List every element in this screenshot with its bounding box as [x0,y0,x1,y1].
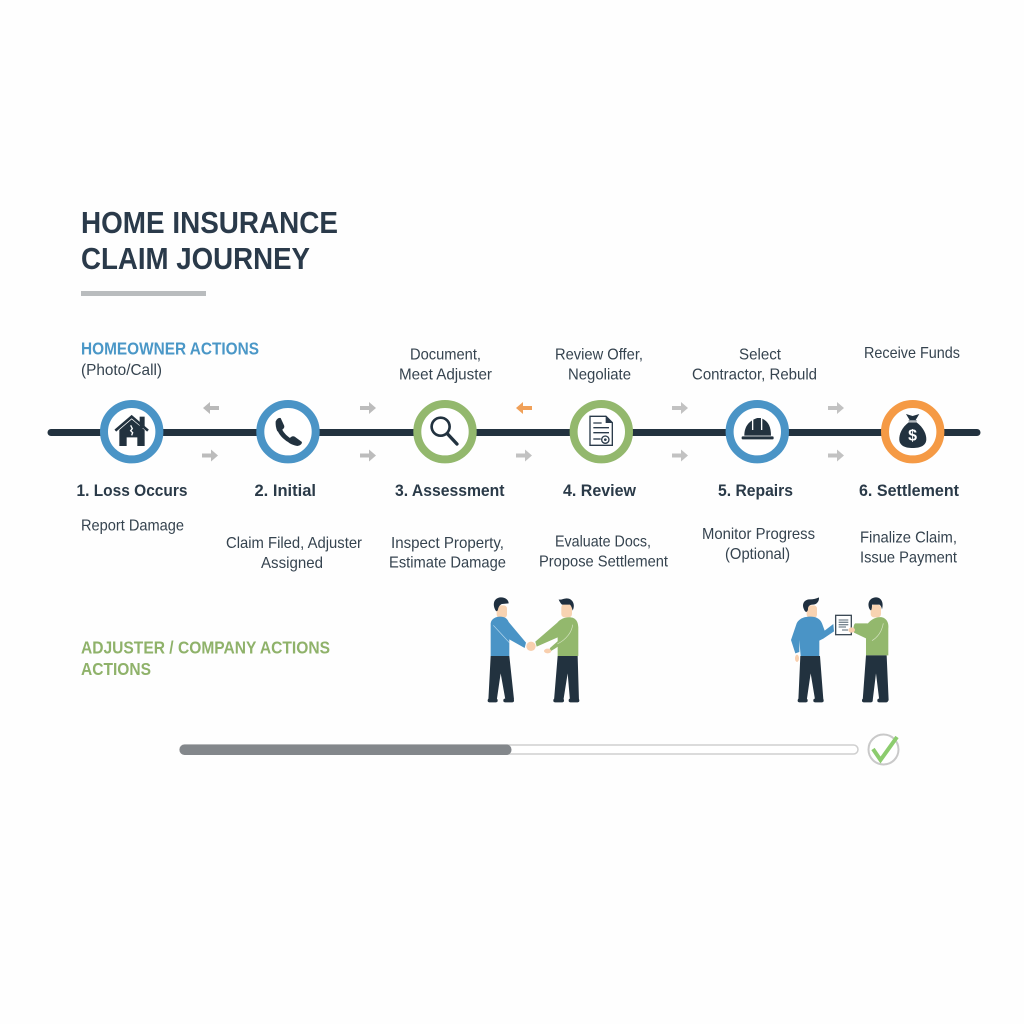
icon: magnifying glass [417,404,473,459]
title: HOME INSURANCE [81,205,338,240]
adjuster step actions: Evaluate Docs, [555,534,651,550]
step titles: 2. Initial [254,481,316,500]
homeowner actions label: HOMEOWNER ACTIONS [81,338,259,358]
homeowner step actions: Meet Adjuster [399,366,493,384]
step titles: 3. Assessment [395,481,505,500]
adjuster step actions: (Optional) [725,546,790,563]
homeowner step actions: Negoliate [568,366,631,384]
adjuster step actions: Finalize Claim, [860,530,957,546]
adjuster step actions: Inspect Property, [391,535,504,552]
step titles: 6. Settlement [859,481,959,500]
step arrows [202,402,844,462]
icon: completion check [868,734,898,764]
title [81,205,338,276]
step titles: 1. Loss Occurs [76,481,188,500]
timeline line [51,429,977,436]
title underline [81,291,206,296]
illustration: two people exchanging a document [791,597,889,702]
icon: house with damage [104,404,159,459]
icon: money bag [885,404,940,459]
icon: phone [260,404,316,459]
adjuster step actions: Assigned [261,555,323,572]
homeowner step actions: Select [739,346,782,364]
adjuster step actions: Claim Filed, Adjuster [226,535,363,552]
homeowner step actions [399,345,960,384]
step titles [76,481,959,500]
adjuster step actions: Monitor Progress [702,526,815,543]
step titles: 4. Review [563,481,637,500]
homeowner actions label [81,338,259,379]
adjuster step actions [81,518,958,572]
title: CLAIM JOURNEY [81,241,310,276]
icon: document [574,404,629,459]
homeowner step actions: Receive Funds [864,345,960,362]
icon: hard hat [730,404,785,459]
adjuster step actions: Estimate Damage [389,554,506,572]
homeowner step actions: Review Offer, [555,346,643,364]
progress bar [180,744,858,755]
adjuster / company actions label: ADJUSTER / COMPANY ACTIONS [81,638,330,658]
step titles: 5. Repairs [718,481,793,500]
adjuster / company actions label: ACTIONS [81,659,151,679]
homeowner actions label: (Photo/Call) [81,362,162,379]
icon: money bag: $ [908,428,917,445]
adjuster step actions: Issue Payment [860,550,958,566]
adjuster step actions: Report Damage [81,518,184,534]
homeowner step actions: Document, [410,346,481,364]
adjuster step actions: Propose Settlement [539,554,669,570]
adjuster / company actions label [81,638,330,679]
illustration: two people shaking hands [488,597,579,702]
homeowner step actions: Contractor, Rebuld [692,366,817,384]
